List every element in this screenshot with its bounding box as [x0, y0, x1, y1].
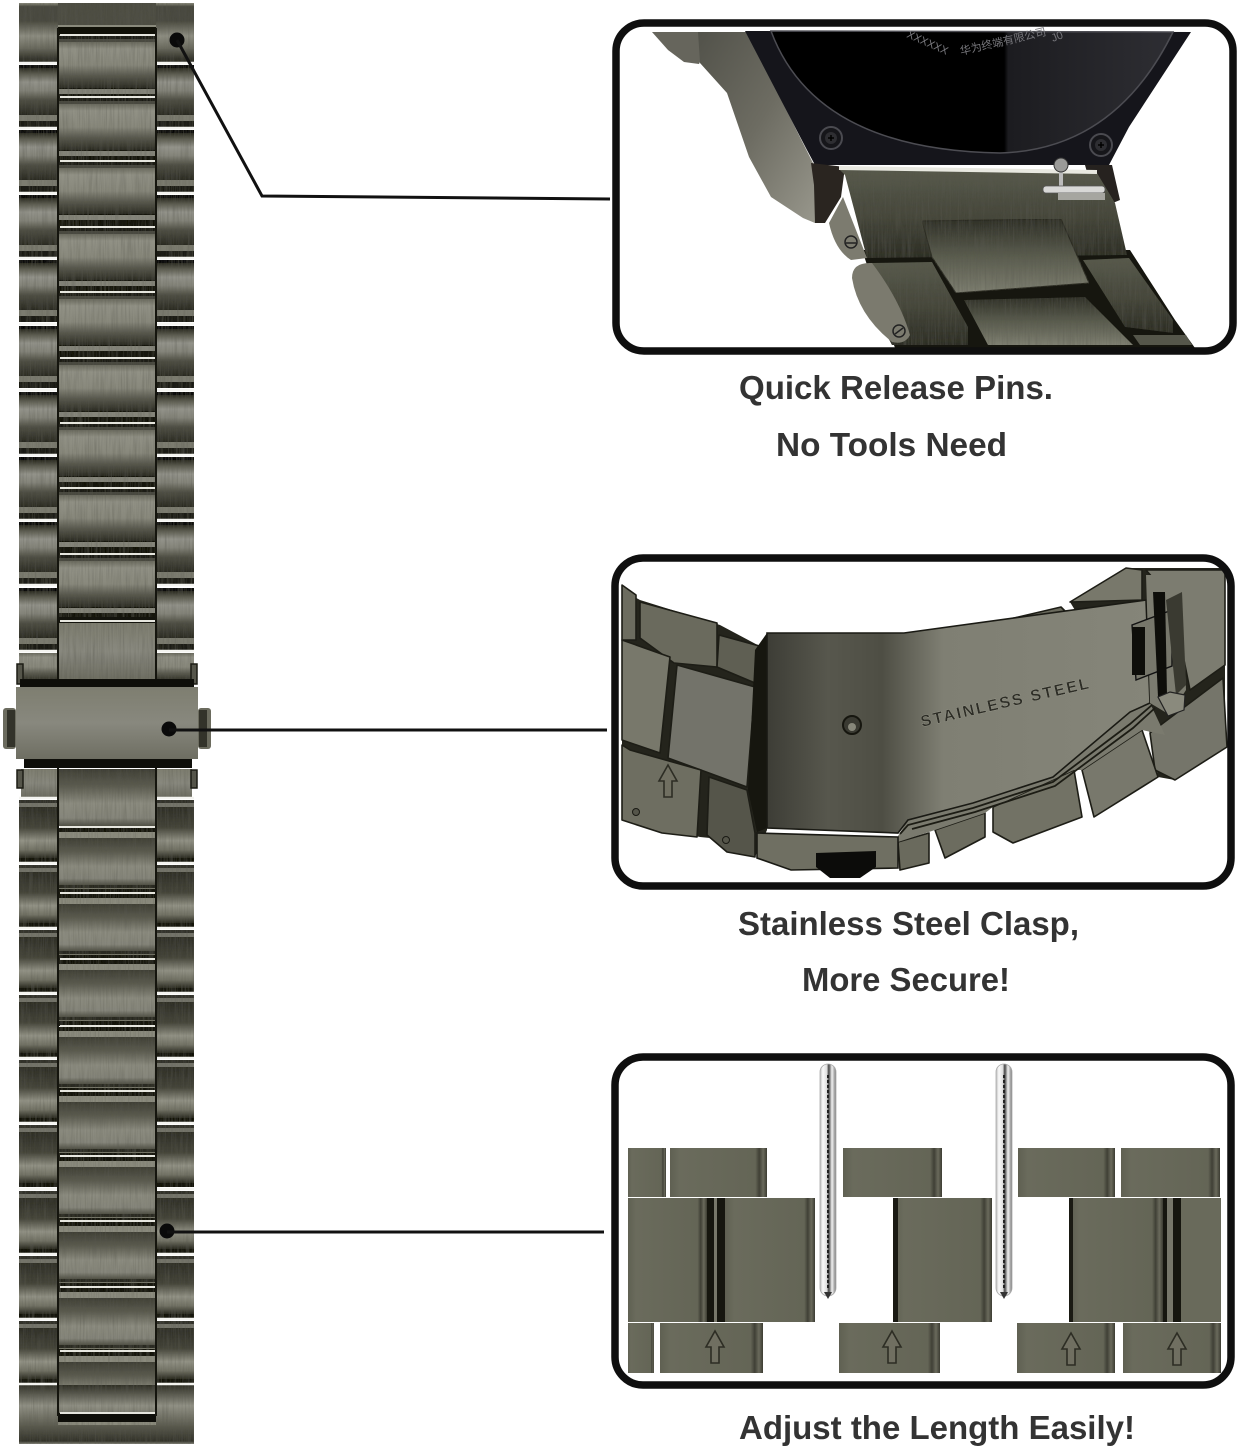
left band links [622, 585, 763, 857]
watch case side [698, 32, 815, 223]
clasp hinge [1132, 575, 1186, 716]
panel frame [615, 558, 1231, 886]
caption: quick release pins: No Tools Need [776, 426, 1007, 463]
connector line: quick release pins [170, 32, 610, 199]
link arrows [706, 1331, 1186, 1365]
panel: stainless steel clasp [615, 558, 1231, 886]
link end with screw [829, 197, 867, 260]
engraved clasp text: STAINLESS STEEL [919, 676, 1091, 731]
engraved back text: 华为终端有限公司 [959, 24, 1047, 58]
panel: adjustable links [615, 1057, 1231, 1385]
bottom end link [19, 1385, 194, 1444]
arrow on left link [659, 765, 677, 797]
caption: clasp: More Secure! [802, 961, 1010, 998]
dark band backing [862, 250, 1195, 348]
engraved back text: XXXXXX [905, 29, 950, 58]
first link highlight [839, 168, 1097, 172]
left link group [628, 1148, 815, 1373]
connector line: clasp [162, 722, 607, 736]
watch and band photo [652, 24, 1195, 348]
engraved back text: J0 [1050, 29, 1065, 45]
clasp [3, 664, 211, 788]
clasp rivet [843, 716, 861, 734]
lower right link [1133, 335, 1192, 345]
panel frame [616, 23, 1233, 351]
watch case lug [811, 163, 845, 223]
upper side links [19, 65, 194, 650]
left gap shadow [748, 633, 767, 832]
caption: quick release pins: Quick Release Pins. [739, 369, 1053, 406]
clasp edge grooves [898, 703, 1165, 842]
panel frame [615, 1057, 1231, 1385]
clasp photo [622, 568, 1227, 878]
watch back glass [771, 31, 1173, 153]
engraved back text [906, 27, 1062, 55]
link end pill [852, 263, 910, 343]
left pin dots [632, 808, 730, 844]
link gap lines [19, 25, 194, 1422]
middle link group [839, 1148, 992, 1373]
second link right [1083, 258, 1173, 333]
second link left [872, 262, 968, 345]
caption: clasp [738, 905, 1079, 998]
clasp hooks [17, 664, 197, 788]
clasp lower edge [757, 833, 898, 870]
right band links [898, 568, 1227, 870]
panel: quick release pins [616, 23, 1233, 351]
caption: quick release pins [739, 369, 1053, 463]
clasp button slot [816, 851, 876, 878]
watch crown [652, 32, 700, 64]
links below clasp [21, 769, 192, 826]
lower centre links [58, 828, 156, 1418]
lower side links [19, 800, 194, 1383]
strap link bodies [19, 3, 194, 1444]
clasp dark gaps [20, 679, 194, 768]
spring bars [820, 1064, 1012, 1299]
upper centre links [58, 36, 156, 621]
right link group [1017, 1148, 1221, 1373]
first band link [839, 169, 1127, 258]
case screws [820, 127, 1112, 156]
watch back [745, 31, 1191, 165]
last links above clasp [19, 623, 194, 681]
connector line: adjustable links [160, 1224, 604, 1238]
lower centre link [964, 297, 1133, 345]
centre link [922, 219, 1089, 293]
dark backing left [622, 590, 767, 857]
watch band strap [3, 3, 211, 1444]
links photo [628, 1064, 1221, 1373]
caption: clasp: Stainless Steel Clasp, [738, 905, 1079, 942]
top end link [19, 3, 194, 63]
clasp plate [767, 600, 1150, 833]
clasp plate [16, 687, 198, 759]
quick release pin [1043, 158, 1105, 200]
caption: adjustable links: Adjust the Length Easily! [739, 1409, 1135, 1446]
dark backing right [1070, 568, 1225, 780]
clasp side buttons [3, 708, 211, 749]
